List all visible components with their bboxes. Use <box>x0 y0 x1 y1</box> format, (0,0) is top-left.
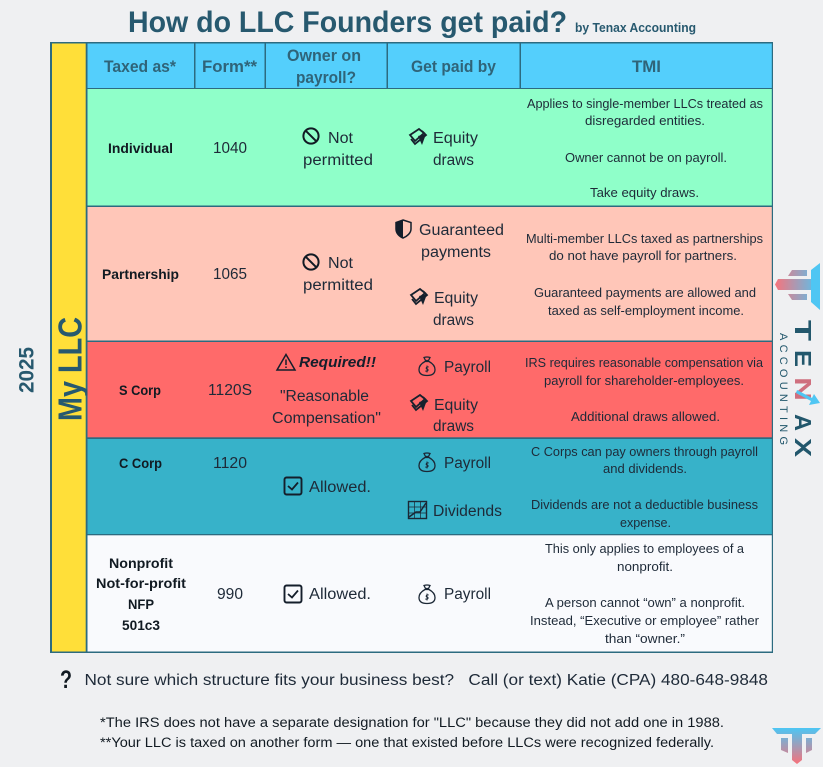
panel: Individual row: permitted <box>303 152 373 169</box>
panel: S Corp row: Payroll <box>444 359 491 376</box>
footnotes: *The IRS does not have a separate designation for "LLC" because they did not add one in 1988. <box>100 715 724 730</box>
panel: S Corp row <box>88 342 772 437</box>
logo: Tenax vertical wordmark <box>775 263 820 458</box>
panel: Nonprofit row: Allowed. <box>309 586 371 603</box>
text block: TMI S Corp: payroll for shareholder-employees. <box>544 374 744 388</box>
panel: header row: Taxed as* <box>104 58 177 76</box>
text block: TMI nonprofit: nonprofit. <box>617 560 673 574</box>
call to action: Not sure which structure fits your business best? Call (or text) Katie (CPA) 480-648-9848 <box>84 672 768 689</box>
table frame <box>50 42 773 653</box>
icon: half shield <box>396 220 411 238</box>
text block: TMI S Corp <box>525 356 763 424</box>
icon: money bag <box>419 585 435 604</box>
panel: Partnership row: 1065 <box>213 266 247 283</box>
panel: header row: Owner on <box>287 47 361 65</box>
logo: Tenax vertical wordmark: X <box>790 438 816 458</box>
footnotes: **Your LLC is taxed on another form — one that existed before LLCs were recognized federally. <box>100 735 714 750</box>
icon: equity draws <box>411 289 427 305</box>
panel: Partnership row: payments <box>421 244 491 261</box>
panel: Partnership row: draws <box>433 312 474 329</box>
icon: arrow in wordmark <box>796 390 820 405</box>
panel: S Corp row: 1120S <box>208 382 252 399</box>
panel: C Corp row: Allowed. <box>309 479 371 496</box>
panel: My LLC sidebar <box>52 44 88 652</box>
panel: S Corp row: Equity <box>434 397 478 414</box>
panel: S Corp row: draws <box>433 418 474 435</box>
text block: TMI C Corp: and dividends. <box>603 462 687 476</box>
text block: TMI partnership: Multi-member LLCs taxed as partnerships <box>526 232 763 246</box>
icon: money bag <box>419 453 435 472</box>
text block: TMI C Corp <box>531 445 758 530</box>
icon: checkbox <box>284 586 302 602</box>
text block: TMI S Corp: IRS requires reasonable compensation via <box>525 356 763 370</box>
year label: 2025 <box>16 347 38 393</box>
panel: Nonprofit row: 501c3 <box>122 617 160 633</box>
text block: TMI C Corp: C Corps can pay owners through payroll <box>531 445 758 459</box>
icon: checkbox <box>284 478 302 494</box>
logo: Tenax vertical wordmark: E <box>790 350 816 367</box>
panel: header row <box>88 44 772 88</box>
text block: TMI S Corp: Additional draws allowed. <box>571 410 720 424</box>
icon: equity draws <box>411 395 427 411</box>
text block: TMI C Corp: expense. <box>620 516 671 530</box>
panel: C Corp row: C Corp <box>119 455 162 471</box>
text block: TMI C Corp: Dividends are not a deductible business <box>531 498 758 512</box>
panel: C Corp row: Payroll <box>444 455 491 472</box>
title: How do LLC Founders get paid? <box>128 6 567 39</box>
panel: header row: payroll? <box>296 69 356 87</box>
logo: Tenax vertical wordmark: A <box>790 414 816 431</box>
panel: header row: TMI <box>632 58 661 76</box>
panel: header row: Form** <box>202 58 258 76</box>
icon: T mark sideways <box>775 263 820 310</box>
text block: TMI nonprofit: This only applies to employees of a <box>545 542 744 556</box>
panel: Individual row: Not <box>328 130 354 147</box>
call to action <box>60 666 768 694</box>
logo: Tenax T mark <box>772 728 821 764</box>
text block: TMI individual: Applies to single-member LLCs treated as <box>527 97 763 111</box>
panel: Partnership row: permitted <box>303 277 373 294</box>
footnotes <box>100 715 724 750</box>
panel: S Corp row: "Reasonable <box>280 388 369 405</box>
text block: TMI individual: Owner cannot be on payroll. <box>565 151 727 165</box>
panel: Partnership row: Equity <box>434 290 478 307</box>
panel: S Corp row: S Corp <box>119 382 161 398</box>
panel: Individual row: Individual <box>108 140 173 156</box>
text block: TMI partnership: Guaranteed payments are allowed and <box>534 286 756 300</box>
text block: TMI individual: Take equity draws. <box>590 186 699 200</box>
text block: TMI partnership <box>526 232 763 318</box>
main table <box>50 42 773 653</box>
panel: Partnership row <box>88 207 772 340</box>
panel: S Corp row: Compensation" <box>272 410 381 427</box>
logo: Tenax vertical wordmark: T <box>790 320 816 341</box>
text block: TMI individual: disregarded entities. <box>585 114 705 128</box>
text block: TMI partnership: taxed as self-employment income. <box>548 304 744 318</box>
icon: money bag <box>419 357 435 376</box>
logo: Tenax vertical wordmark: N <box>790 377 816 401</box>
icon: question mark: ? <box>60 666 72 694</box>
panel: Nonprofit row: 990 <box>217 586 243 603</box>
panel: Nonprofit row: Payroll <box>444 586 491 603</box>
panel: Partnership row: Guaranteed <box>419 222 504 239</box>
panel: Partnership row: Not <box>328 255 354 272</box>
panel: C Corp row: Dividends <box>433 503 502 520</box>
icon: not permitted <box>303 254 319 270</box>
text block: TMI nonprofit: A person cannot “own” a nonprofit. <box>545 596 745 610</box>
panel: Nonprofit row: Not-for-profit <box>96 575 186 591</box>
panel: My LLC sidebar: My LLC <box>52 317 88 421</box>
icon: warning triangle <box>277 354 295 370</box>
panel: Individual row: Equity <box>433 130 478 147</box>
icon: dividends chart <box>408 502 426 518</box>
panel: header row: Get paid by <box>411 58 497 76</box>
panel: Nonprofit row: Nonprofit <box>109 555 173 571</box>
title: by Tenax Accounting <box>575 21 696 35</box>
text block: TMI nonprofit: than “owner.” <box>605 632 685 646</box>
panel: Individual row <box>88 89 772 206</box>
panel: Nonprofit row: NFP <box>128 596 154 612</box>
panel: Nonprofit row <box>88 535 772 652</box>
icon: equity draws <box>410 129 426 145</box>
panel: Individual row: draws <box>433 152 474 169</box>
text block: TMI nonprofit: Instead, “Executive or employee” rather <box>530 614 759 628</box>
panel: Partnership row: Partnership <box>102 266 179 282</box>
panel: Individual row: 1040 <box>213 140 247 157</box>
panel: C Corp row: 1120 <box>213 455 247 472</box>
text block: TMI partnership: do not have payroll for partners. <box>549 249 737 263</box>
panel: C Corp row <box>88 439 772 534</box>
panel: S Corp row: Required!! <box>299 354 376 371</box>
text block: TMI individual <box>527 97 763 200</box>
text block: TMI nonprofit <box>530 542 759 646</box>
logo: Tenax vertical wordmark: ACCOUNTING <box>777 333 789 445</box>
icon: not permitted <box>303 128 319 144</box>
